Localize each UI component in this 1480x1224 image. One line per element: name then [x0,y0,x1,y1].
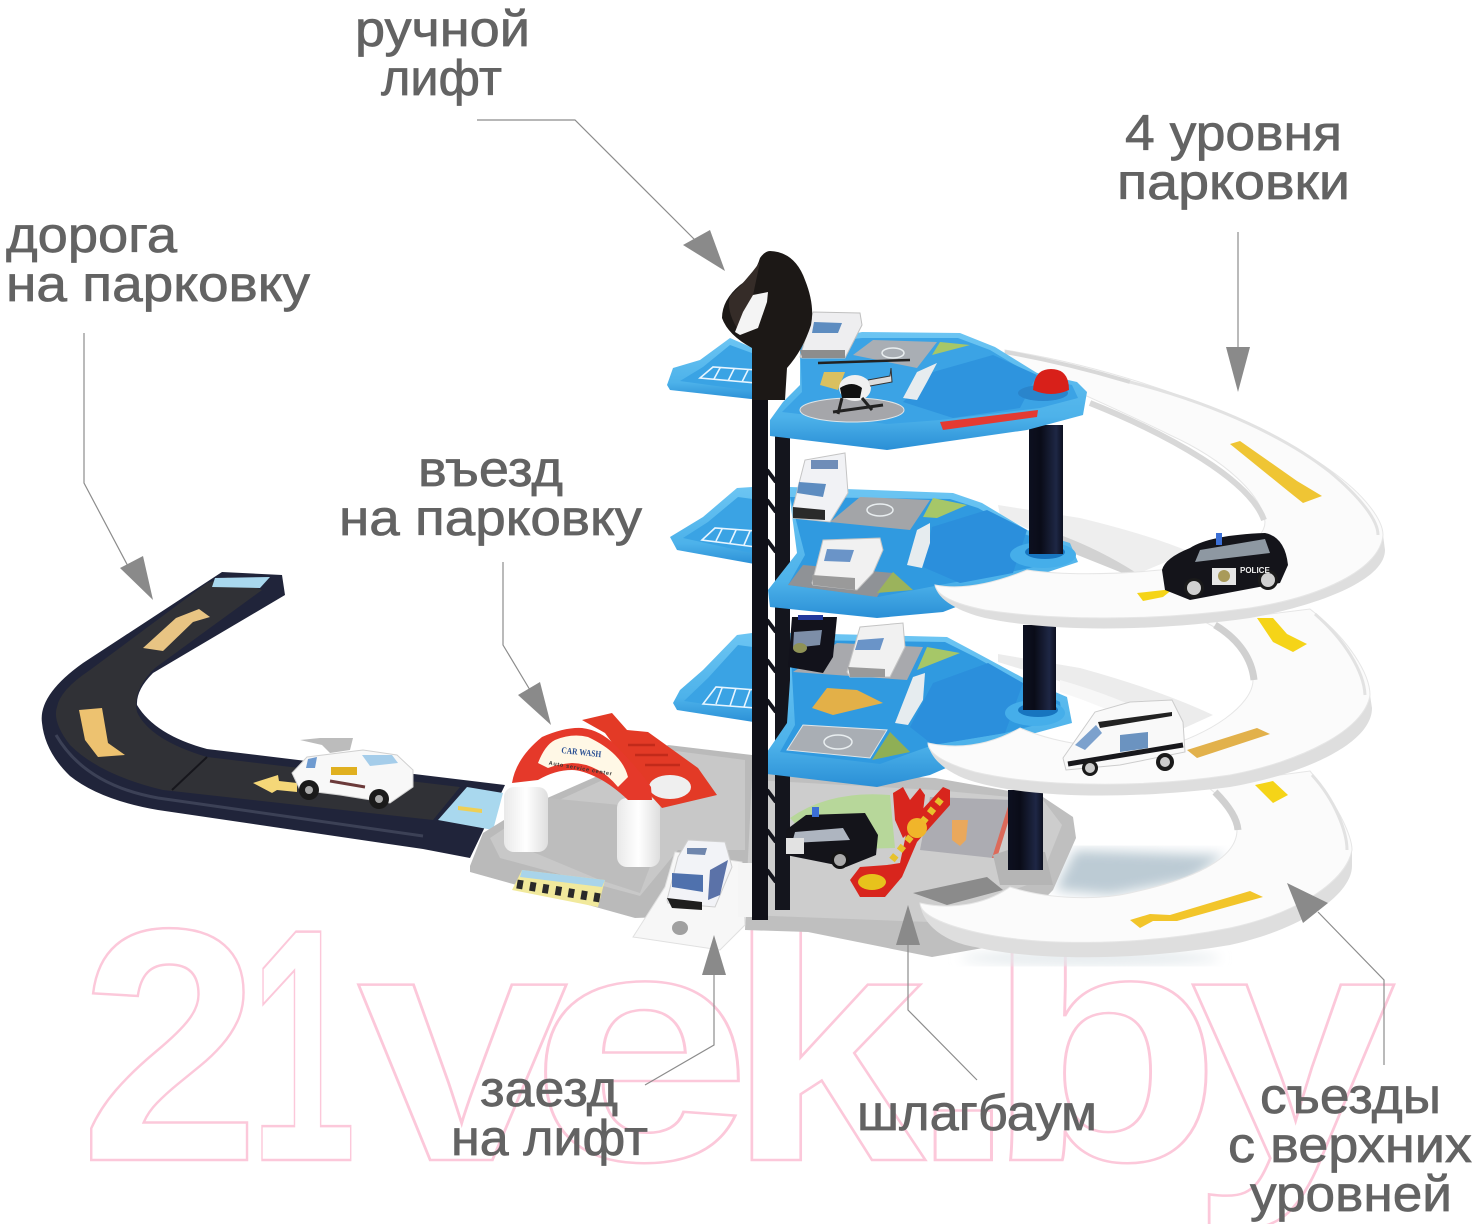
police SUV on top ramp [1162,533,1288,600]
police SUV on top ramp: POLICE [1240,566,1270,575]
road arrows [143,609,210,651]
watermark: 21vek.by: k [727,860,927,1224]
red dome button [1033,369,1069,394]
label: съезды с верхних уровней [1228,1068,1472,1222]
lift head highlight [729,262,760,328]
label: съезды с верхних уровней: с верхних [1228,1117,1472,1173]
police pickup on level 3 [847,623,905,677]
wing markings [702,528,756,547]
arrow: ручной лифт [477,120,725,271]
top patch [212,577,270,588]
black police SUV on base [786,807,878,869]
ramp: top level [935,350,1385,628]
label: съезды с верхних уровней: съезды [1260,1068,1441,1124]
label: заезд на лифт [451,1061,648,1166]
label: ручной лифт: лифт [381,50,502,106]
pillar: lowest [1008,790,1043,870]
label: въезд на парковку [339,441,642,546]
white guide [903,363,937,400]
watermark: 21vek.by: 2 [80,860,260,1224]
lift ramp with van [633,840,752,950]
floor print with arrow [920,797,1013,858]
grey base [470,745,1076,957]
ramp: third level [920,771,1352,957]
police van on level 2 [793,453,848,522]
inner wall [1215,625,1254,680]
arm [850,787,950,897]
inner wall [1215,792,1238,830]
shadow under the base [960,850,1225,965]
green print lower [872,732,910,760]
curved entry [923,510,1027,583]
fan [893,787,925,838]
lip [1312,775,1347,850]
green print [917,647,960,670]
front rail [752,345,768,920]
roof ribs [628,745,680,765]
watermark: 21vek.by: y [1190,860,1398,1224]
rim [920,850,1352,957]
red roof [582,713,717,808]
lift handle [735,292,768,335]
grey slot [793,643,923,680]
label: дорога на парковку: дорога [6,207,177,263]
surface [920,771,1352,942]
green print [923,498,967,518]
arrow: дорога на парковку [84,333,153,600]
wing [667,338,760,400]
surface [935,350,1383,618]
parking tile [787,725,887,758]
helipad [800,398,904,422]
ramp 2 rear strip [998,505,1190,574]
road edge highlight [56,735,423,836]
pillar socket [1010,542,1076,568]
parking tile [853,340,937,368]
manual lift tower [722,251,812,920]
label: 4 уровня парковки: парковки [1117,154,1350,210]
green print [932,342,970,355]
ramp arrows [1230,441,1322,503]
pillar: middle [1023,625,1056,710]
label: 4 уровня парковки: 4 уровня [1125,105,1342,161]
watermark: 21vek.by: e [530,860,752,1224]
road surface [56,577,460,820]
arrow: въезд на парковку [503,562,551,725]
roof disc [649,775,691,799]
white post [738,863,752,917]
police pickup on level 2 [812,538,883,590]
road to the parking [42,572,505,858]
car wash base [470,745,752,918]
blue platform: level 1 [667,332,1087,450]
label: шлагбаум: шлагбаум [857,1085,1097,1141]
label: заезд на лифт: на лифт [451,1110,648,1166]
helicopter [818,360,910,414]
pillar: upper [1029,425,1063,554]
wing markings [703,687,756,708]
deck [770,332,1087,450]
lift back rail with rungs [767,425,790,910]
surface [928,609,1370,784]
label: 4 уровня парковки [1117,105,1350,210]
ramp arrows [1257,618,1307,652]
label: съезды с верхних уровней: уровней [1250,1166,1452,1222]
curved entry [910,663,1023,745]
blue platform: level 2 [670,487,1078,618]
car wash text: CAR WASH [561,745,602,759]
arrow: заезд на лифт [645,935,726,1085]
label: въезд на парковку: въезд [418,441,563,497]
label: дорога на парковку [6,207,310,312]
deck [768,487,1078,618]
back edge [1005,352,1130,382]
lip [1315,614,1365,695]
police van on second ramp [1063,700,1185,776]
washing entrance sign [512,870,605,907]
watermark: 21vek.by [80,860,1398,1224]
black police car on level 3 [788,615,837,673]
pillar foot [993,850,1053,885]
rim [935,535,1385,628]
road body [42,572,505,858]
arrow: съезды с верхних уровней [1287,883,1384,1065]
car wash tray [528,798,660,893]
lift head [722,251,812,400]
car wash gate [504,713,717,867]
arrow: 4 уровня парковки [1226,232,1250,392]
lip [1130,382,1378,535]
wing [670,487,760,565]
wing markings [700,367,756,383]
label: дорога на парковку: на парковку [6,256,310,312]
vehicle: white armored police car [292,738,413,809]
main base [745,770,1076,957]
red barrier [850,787,950,897]
watermark: 21vek.by: v [357,860,570,1224]
deck [767,633,1072,787]
ramp 3 rear strip [998,654,1213,735]
ramp: second level [928,609,1372,796]
entry patch [438,787,503,830]
white guide [907,523,930,568]
rim [928,695,1372,796]
label: ручной лифт: ручной [355,1,530,57]
watermark: 21vek.by: 1 [250,860,356,1224]
yellow sign [820,372,845,390]
red stop bar [940,410,1038,430]
yellow road sign [812,688,883,715]
white guide [895,673,925,725]
watermark: 21vek.by: b [985,860,1222,1224]
car wash gate: Auto service center [548,761,613,778]
wing [673,633,760,723]
arch sign [538,736,628,787]
inner wall [1090,403,1264,520]
ramp arrows [1130,891,1263,928]
pillar socket [1005,700,1065,726]
label: ручной лифт [355,1,530,106]
curved entry [903,355,1037,418]
police van on level 1 [800,312,862,358]
pillars [504,787,548,852]
parking tile [830,497,930,530]
lawn print [790,794,895,850]
parking line patch [913,877,1003,905]
road seam [172,757,207,790]
van [667,840,732,907]
dome base [1018,385,1068,401]
arch [512,728,652,800]
watermark: 21vek.by: . [908,860,1019,1224]
label: въезд на парковку: на парковку [339,490,642,546]
arrow: шлагбаум [896,905,977,1080]
lower grey slot [788,565,893,597]
blue platform: level 3 [673,633,1072,787]
label: заезд на лифт: заезд [480,1061,618,1117]
